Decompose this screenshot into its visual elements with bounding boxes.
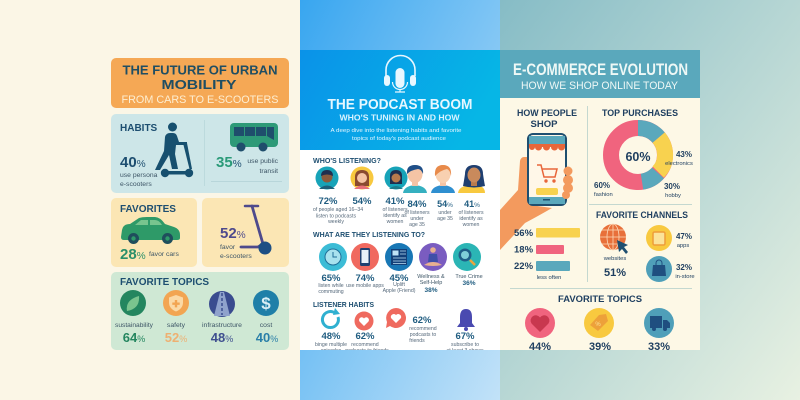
header: podcast boom: topics of today's podcast audience	[352, 136, 446, 142]
panel: favorite topics	[111, 272, 289, 350]
stats: content: 38%	[424, 287, 438, 294]
topic: safety	[163, 290, 189, 345]
stat: 40% personal e-scooters: use persona	[120, 172, 158, 179]
stats: habits: friends	[409, 338, 425, 344]
chart: shopping frequency bars: 56%	[514, 228, 534, 239]
topic: infrastructure: infrastructure	[202, 322, 242, 329]
stats: who's listening: identify as	[383, 213, 407, 219]
topic: price tag 39%	[584, 308, 614, 353]
stat: websites 51%	[604, 256, 626, 276]
panel: habits	[111, 114, 289, 193]
stats: who's listening: under	[410, 216, 424, 222]
stat: 35% public transit: 35%	[216, 154, 242, 171]
stats: who's listening	[313, 196, 484, 228]
stat: 35% public transit: transit	[259, 168, 278, 175]
chart: donut top purchases: electronics	[665, 161, 693, 167]
topic: price tag 39%: 39%	[589, 341, 611, 353]
topic: price tag 39%: %	[595, 322, 601, 328]
stat: in-store 32%: 32%	[676, 263, 692, 272]
stat: 28% favor cars	[120, 246, 179, 263]
stats: who's listening: listen to podcasts	[316, 214, 356, 220]
topic: heart 44%	[525, 308, 555, 353]
stat: 28% favor cars: favor cars	[149, 251, 179, 258]
stats: content	[318, 273, 483, 295]
chart: shopping frequency bars: less often	[537, 275, 561, 281]
chart: donut top purchases: 43%	[676, 150, 692, 159]
topic: cost: 40%	[256, 330, 278, 345]
topic: cost: $	[261, 294, 271, 313]
header: e-commerce evolution	[500, 50, 700, 98]
heading: listener habits: LISTENER HABITS	[313, 300, 374, 309]
panel: urban mobility infographic	[111, 58, 289, 350]
stats: content: Apple (Friend)	[383, 288, 416, 294]
chart: donut top purchases	[594, 128, 693, 199]
stats: who's listening: women	[463, 222, 479, 228]
stats: habits: at least 3 shows	[446, 348, 484, 354]
stat: 52% favor e-scooters: favor	[220, 244, 236, 251]
topic: sustainability	[115, 290, 154, 345]
stats: content: listen while	[318, 283, 344, 289]
header: e-commerce evolution: HOW WE SHOP ONLINE TODAY	[521, 80, 679, 92]
header: e-commerce evolution: E-COMMERCE EVOLUTION	[513, 61, 688, 79]
stats: habits: 62%	[355, 331, 375, 342]
stat: 40% personal e-scooters: e-scooters	[120, 181, 152, 188]
stats: habits: binge multiple	[315, 342, 347, 348]
stat: 40% personal e-scooters	[120, 154, 158, 188]
stats: who's listening: women	[387, 219, 403, 225]
stats: who's listening: weekly	[328, 219, 344, 225]
stats: who's listening: identify as	[459, 216, 483, 222]
stats: habits: podcasts to friends	[345, 348, 389, 354]
icon: person on scooter	[155, 122, 193, 177]
stats: habits: podcasts to	[410, 332, 436, 338]
topic: delivery truck 33%: 33%	[648, 341, 670, 353]
stat: 52% favor e-scooters: e-scooters	[220, 253, 252, 260]
stat: 52% favor e-scooters	[220, 225, 252, 260]
header: podcast boom: A deep dive into the listening habits and favorite	[330, 128, 462, 134]
chart: donut top purchases: 60%	[625, 150, 651, 164]
stats: habits: subscribe to	[451, 342, 479, 348]
stats: content: 45%	[389, 273, 409, 284]
icon: hand holding phone with shop	[500, 134, 573, 250]
stats: content: commuting	[318, 289, 344, 295]
heading: how people shop: HOW PEOPLE	[517, 108, 577, 119]
panel: favorites cars: FAVORITES	[120, 204, 176, 215]
topic: cost: cost	[260, 322, 272, 329]
stats: content: True Crime	[455, 274, 483, 280]
icon: bus	[230, 123, 278, 152]
chart: donut top purchases: 30%	[664, 182, 680, 191]
panel: habits: HABITS	[120, 123, 158, 134]
stats: who's listening: age 35	[437, 216, 453, 222]
stats: who's listening: of listeners	[382, 207, 408, 213]
stat: apps 47%	[646, 225, 692, 251]
stats: habits: 48%	[321, 331, 341, 342]
stats: habits: recommend	[409, 326, 437, 332]
topic: delivery truck 33%	[644, 308, 674, 353]
stats: who's listening: of listeners	[404, 210, 430, 216]
stat: websites 51%: websites	[603, 256, 626, 262]
title: future of urban mobility	[111, 58, 289, 108]
stats: content: 36%	[462, 280, 476, 287]
heading: who's listening: WHO'S LISTENING?	[313, 156, 381, 165]
icon: car	[121, 217, 180, 244]
chart: shopping frequency bars: 18%	[514, 244, 534, 256]
stats: habits: 62%	[412, 315, 432, 326]
stat: apps 47%: apps	[677, 243, 689, 249]
stats: content: Wellness &	[417, 274, 445, 280]
stat: 35% public transit	[216, 154, 279, 175]
group: habit icons	[322, 308, 475, 331]
stat: 40% personal e-scooters: 40%	[120, 154, 146, 171]
stat: 28% favor cars: 28%	[120, 246, 146, 263]
chart: donut top purchases: fashion	[594, 192, 613, 198]
topic: safety: safety	[167, 322, 186, 329]
heading: top purchases: TOP PURCHASES	[602, 108, 678, 119]
stats: who's listening: of listeners	[458, 210, 484, 216]
stats: habits: episodes	[321, 348, 342, 354]
stats: content: Uplift	[393, 282, 405, 288]
stats: who's listening: 41%	[385, 196, 405, 207]
stats: who's listening: age 35	[409, 222, 425, 228]
panel: podcast boom infographic	[300, 50, 500, 354]
stats: content: 65%	[321, 273, 341, 284]
panel: favorite topics: FAVORITE TOPICS	[120, 277, 209, 288]
stats: habits: 67%	[455, 331, 475, 342]
icon: scooter	[241, 206, 272, 254]
stat: in-store 32%: in-store	[675, 274, 695, 280]
stats: who's listening: of people aged 16–34	[313, 207, 363, 213]
icon: website globe	[600, 224, 628, 254]
header: podcast boom	[300, 50, 500, 150]
heading: favorite channels: FAVORITE CHANNELS	[596, 210, 688, 220]
stats: content: Self-Help	[420, 280, 442, 286]
stat: 52% favor e-scooters: 52%	[220, 225, 246, 242]
chart: shopping frequency bars: 22%	[514, 261, 534, 272]
topic: sustainability: 64%	[123, 330, 145, 345]
stats: who's listening: under	[438, 210, 452, 216]
header: podcast boom: THE PODCAST BOOM	[328, 96, 472, 113]
stat: apps 47%: 47%	[676, 232, 692, 241]
panel: favorites cars	[111, 198, 197, 267]
title: future of urban mobility: MOBILITY	[162, 77, 237, 92]
topic: safety: 52%	[165, 330, 187, 345]
stats: content: use mobile apps	[346, 283, 384, 289]
chart: donut top purchases: 60%	[594, 181, 610, 190]
stats: who's listening: 72%	[318, 196, 338, 207]
stats: who's listening: 54%	[437, 199, 453, 209]
topic: heart 44%: 44%	[529, 341, 551, 353]
topic: cost	[253, 290, 279, 345]
panel: e-commerce evolution infographic	[500, 50, 700, 353]
panel: favorites e-scooters	[202, 198, 289, 267]
stats: who's listening: 54%	[352, 196, 372, 207]
heading: what are they listening to: WHAT ARE THEY LISTENING TO?	[313, 230, 425, 239]
heading: favorite topics: FAVORITE TOPICS	[558, 294, 642, 305]
header: podcast boom: WHO'S TUNING IN AND HOW	[340, 114, 460, 122]
stats: habits	[315, 316, 484, 350]
heading: how people shop line two: SHOP	[531, 119, 558, 130]
stat: in-store 32%	[646, 256, 695, 282]
topic: infrastructure	[202, 291, 242, 345]
title: future of urban mobility: THE FUTURE OF URBAN	[122, 62, 278, 78]
stats: content: 74%	[355, 273, 375, 284]
stats: habits: recommend	[351, 342, 379, 348]
stat: 35% public transit: use public	[247, 158, 279, 165]
group: round listener portraits	[316, 166, 408, 190]
stats: who's listening: 41%	[464, 199, 480, 209]
topic: infrastructure: 48%	[211, 330, 233, 345]
chart: shopping frequency bars	[514, 228, 580, 281]
title: future of urban mobility: FROM CARS TO E-SCOOTERS	[122, 94, 278, 106]
icon: microphone headset	[384, 56, 416, 92]
group: content icons	[319, 243, 481, 271]
topic: sustainability: sustainability	[115, 322, 154, 329]
stats: who's listening: 84%	[407, 199, 427, 210]
stat: websites 51%: 51%	[604, 267, 626, 279]
group: bust listener portraits	[403, 165, 485, 193]
chart: donut top purchases: hobby	[665, 193, 681, 199]
